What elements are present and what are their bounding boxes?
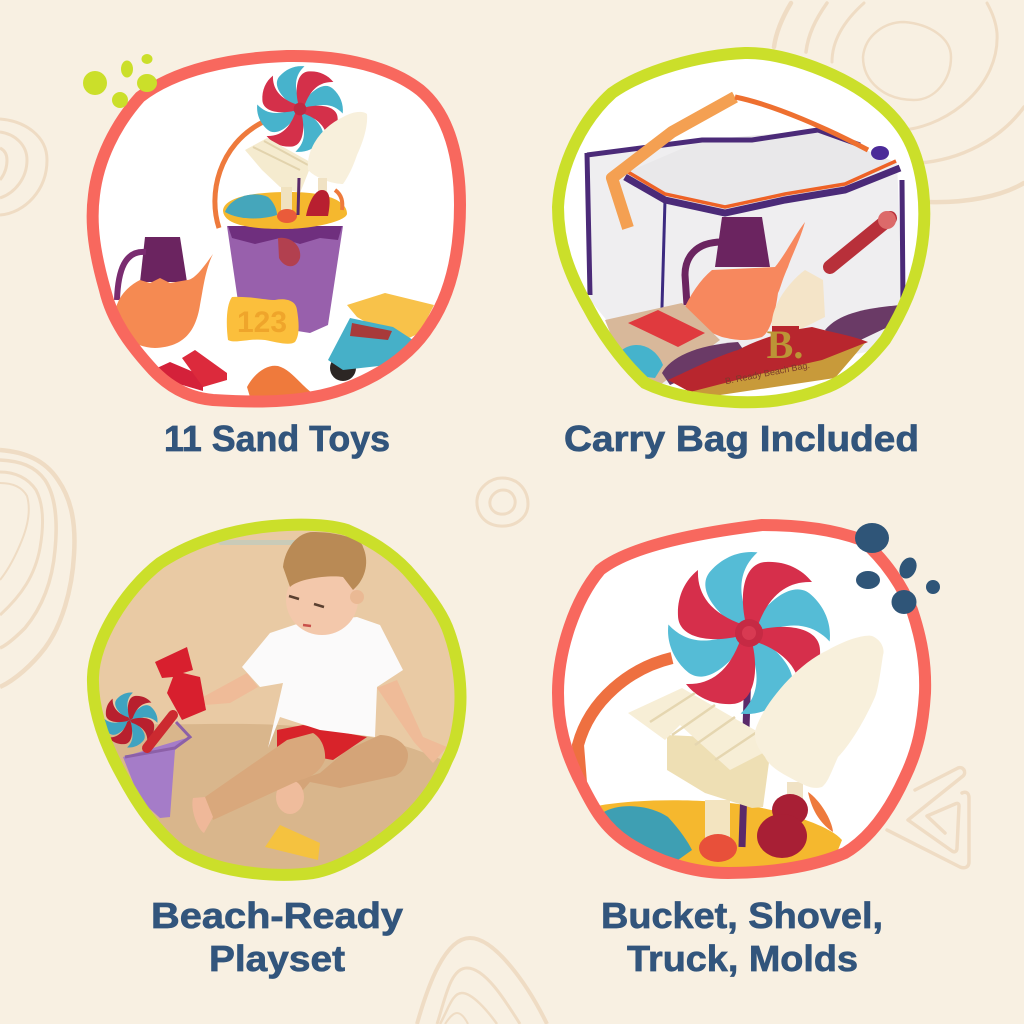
icon: red blocks	[157, 350, 227, 391]
blob outline	[558, 53, 924, 402]
icon: red toy	[155, 647, 206, 720]
icon: shovel inside	[772, 211, 896, 332]
toys and label card: B.	[767, 322, 803, 367]
strap	[612, 97, 735, 228]
background swirl: bottom centre	[417, 938, 547, 1024]
panel: carry bag	[558, 53, 924, 402]
blob outline	[93, 525, 460, 875]
heading: Bucket, Shovel, Truck, Molds: Bucket, Shovel,	[601, 895, 883, 936]
icon: yellow mold	[265, 825, 320, 860]
icon: large pinwheel	[668, 552, 830, 848]
icon: watering can	[115, 237, 213, 348]
arms	[203, 673, 258, 705]
icon: shell mold	[247, 366, 310, 396]
shirt	[242, 617, 403, 748]
heading: Bucket, Shovel, Truck, Molds: Truck, Molds	[627, 938, 858, 979]
heading: 11 Sand Toys: 11 Sand Toys	[164, 418, 390, 459]
blob outline	[558, 525, 925, 873]
icon: lime dots	[83, 54, 157, 108]
heading: Beach-Ready Playset	[151, 895, 403, 979]
icon: shovel	[306, 112, 367, 216]
panel: close up	[558, 525, 925, 880]
front leg	[205, 733, 325, 820]
shorts	[277, 725, 367, 760]
icon: clear bag	[587, 97, 903, 398]
background swirl: left middle	[0, 450, 74, 687]
icon: navy dots	[855, 523, 940, 614]
back leg	[296, 735, 408, 790]
heading: Bucket, Shovel, Truck, Molds	[601, 895, 883, 979]
icon: bucket with pinwheel	[98, 688, 190, 818]
heading: Carry Bag Included: Carry Bag Included	[564, 418, 919, 459]
panel: child on beach	[85, 520, 465, 880]
icon: bucket	[215, 122, 347, 333]
toys and label card	[605, 303, 900, 398]
icon: 123 mold: 123	[237, 306, 287, 339]
icon: pinwheel	[257, 66, 343, 152]
background swirl: left top	[0, 119, 47, 215]
background swirl: bottom right triangle	[887, 768, 969, 868]
heading: Beach-Ready Playset: Beach-Ready	[151, 895, 403, 936]
head	[286, 576, 358, 635]
icon: watering can inside	[682, 217, 805, 340]
background swirl: top right	[774, 3, 1024, 202]
toys and label card: B. Ready Beach Bag.	[724, 360, 811, 386]
icon: child	[192, 532, 447, 833]
icon: truck	[328, 293, 434, 381]
panel: 11 sand toys	[93, 56, 460, 402]
icon: rake	[245, 138, 312, 223]
blob outline	[93, 56, 460, 402]
sand background	[99, 530, 454, 760]
icon: bucket rim	[578, 658, 842, 880]
icon: 123 mold	[227, 297, 299, 344]
icon: rake	[628, 688, 772, 862]
background swirl: centre	[477, 478, 528, 526]
heading: Beach-Ready Playset: Playset	[209, 938, 345, 979]
icon: shovel	[755, 636, 884, 858]
